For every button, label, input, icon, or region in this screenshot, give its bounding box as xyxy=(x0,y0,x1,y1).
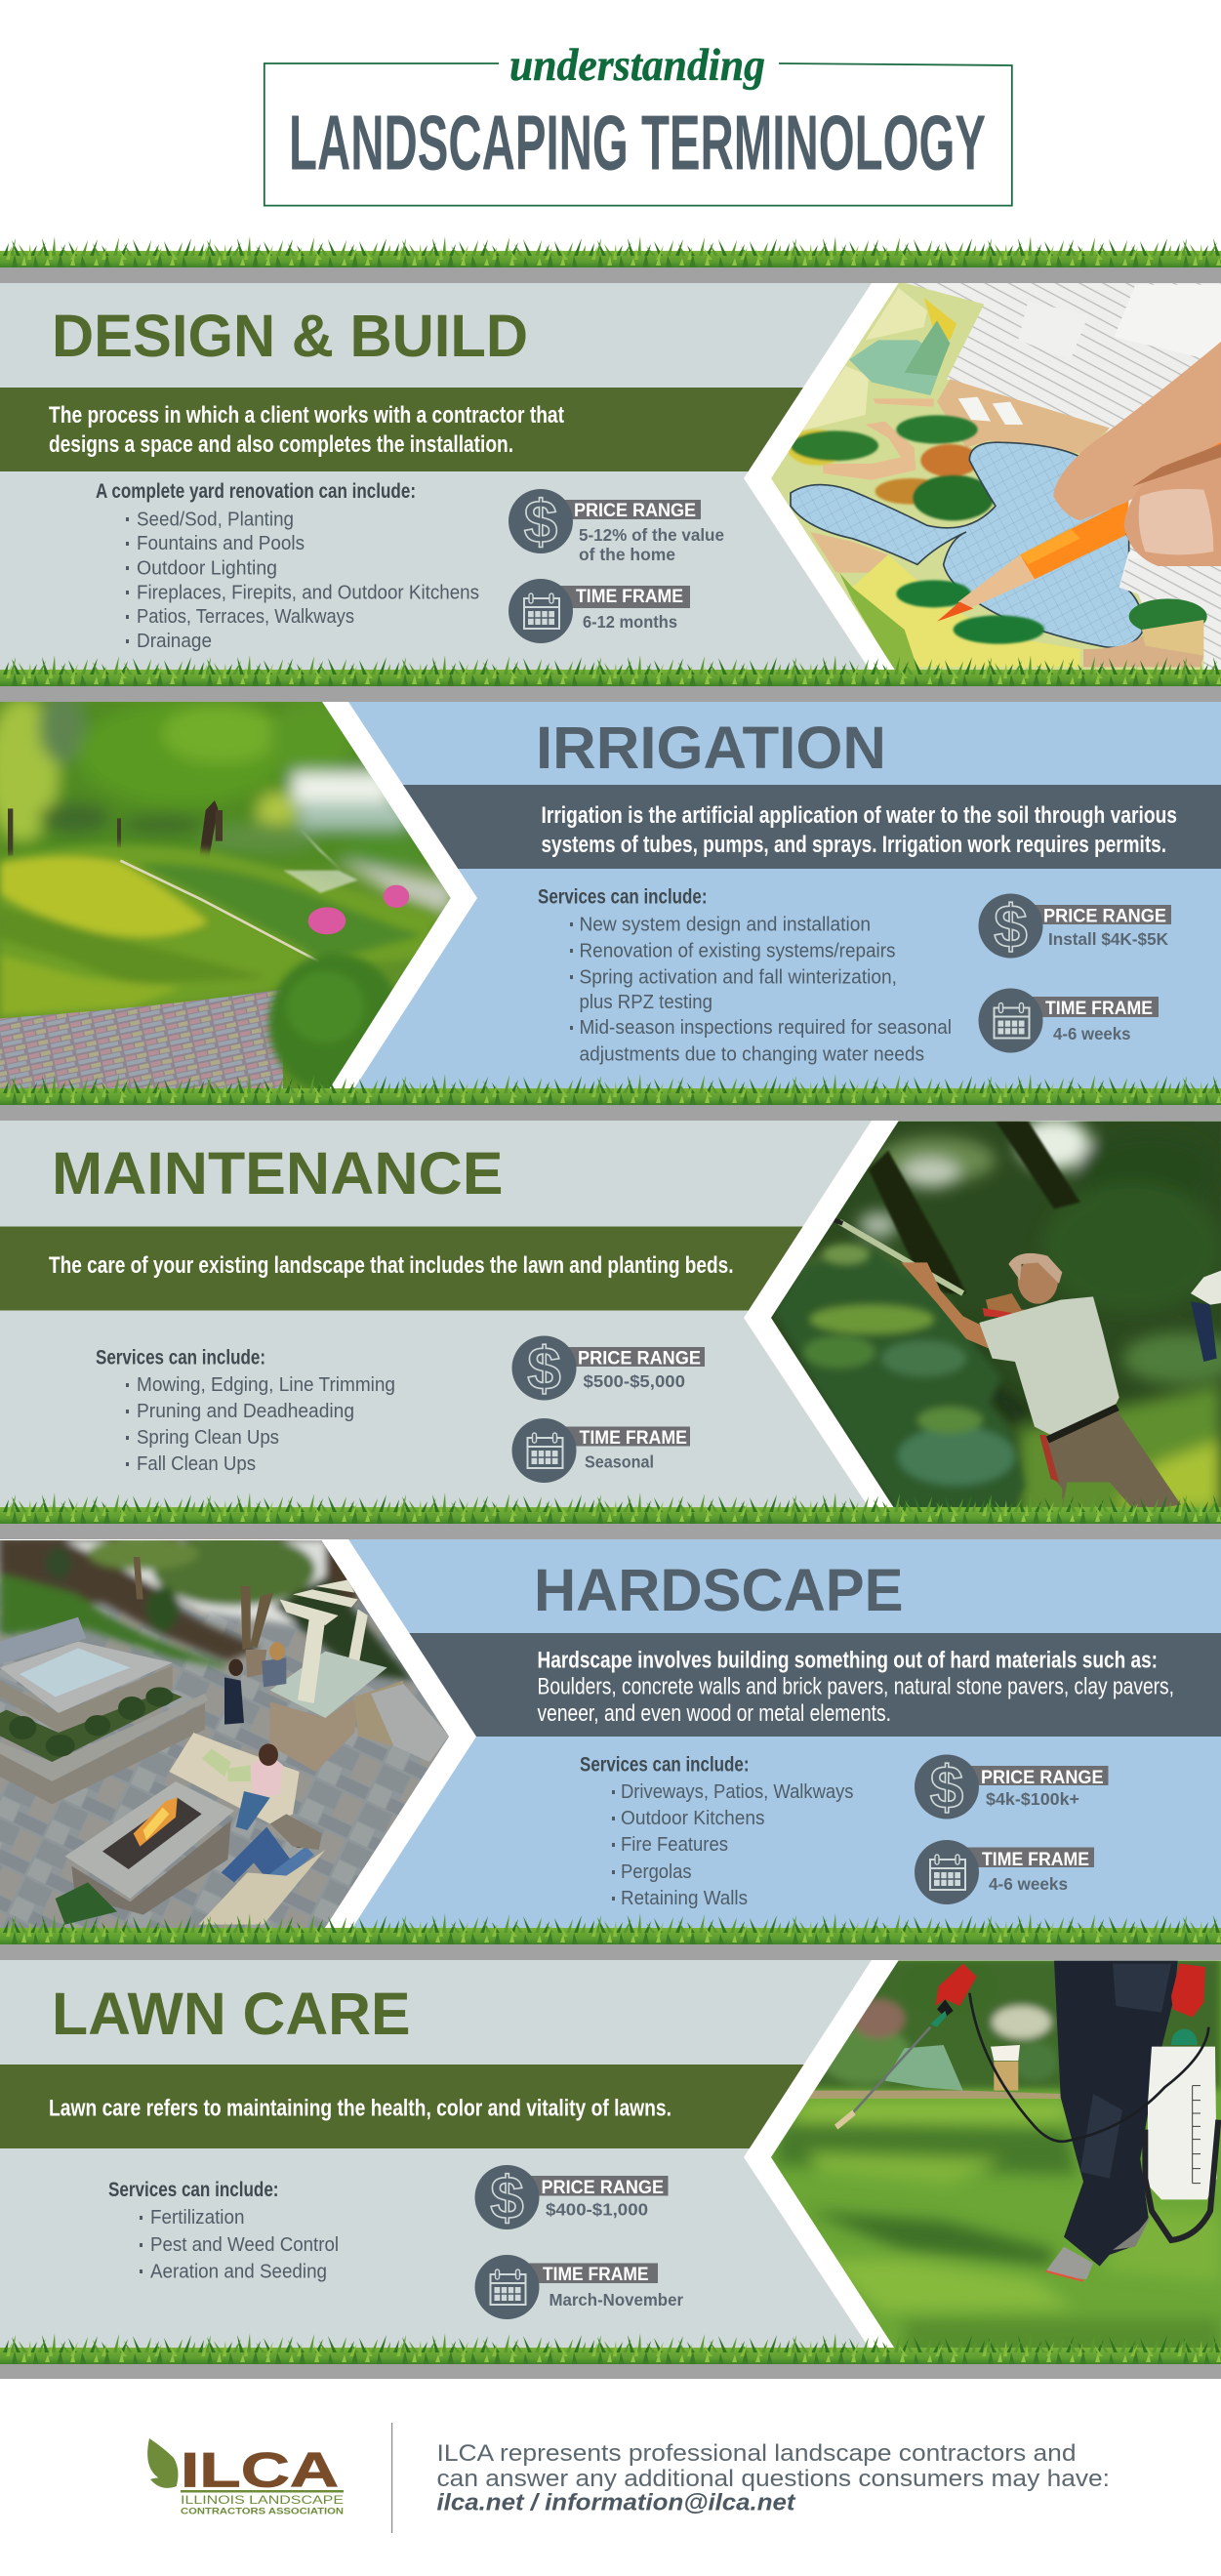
grass divider 2 xyxy=(0,1074,1221,1105)
grey bar 1 xyxy=(0,686,1221,702)
time frame: irrigation: TIME FRAME xyxy=(1045,999,1153,1019)
services list: design and build: Fireplaces, Firepits, and Outdoor Kitchens xyxy=(137,582,479,603)
price range: hardscape: $4k-$100k+ xyxy=(986,1789,1079,1809)
description band: maintenance xyxy=(0,1226,878,1310)
price range: irrigation: PRICE RANGE xyxy=(1043,906,1166,927)
grey bar 2 xyxy=(0,1105,1221,1121)
services list: irrigation xyxy=(538,886,952,1066)
time frame: design and build: TIME FRAME xyxy=(576,587,683,607)
description band: hardscape: veneer, and even wood or metal elements. xyxy=(537,1700,891,1727)
description band: maintenance: The care of your existing landscape that includes the lawn and planting beds. xyxy=(49,1252,734,1279)
title script word: understanding: understanding xyxy=(509,40,765,91)
price range: design and build: 5-12% of the value xyxy=(579,525,724,545)
services list: lawn care: Pest and Weed Control xyxy=(150,2234,339,2256)
services list: hardscape: Pergolas xyxy=(621,1861,691,1883)
footer text: can answer any additional questions consumers may have: xyxy=(437,2466,1110,2492)
icon: leaves xyxy=(147,2438,178,2488)
panel: maintenance xyxy=(0,1118,1221,1528)
services list: lawn care: Services can include: xyxy=(108,2179,279,2201)
description band: irrigation xyxy=(390,785,1221,869)
time frame: lawn care: March-November xyxy=(549,2290,683,2310)
price range: irrigation: Install $4K-$5K xyxy=(1048,929,1168,949)
description band: lawn care xyxy=(0,2065,878,2148)
time frame: maintenance: Seasonal xyxy=(585,1452,654,1472)
logo: ILCA: ILLINOIS LANDSCAPE xyxy=(181,2493,344,2507)
panel: lawn care xyxy=(0,1957,1221,2374)
services list: design and build: Patios, Terraces, Walkways xyxy=(137,606,354,628)
services list: irrigation: Renovation of existing systems/repairs xyxy=(580,941,896,962)
services list: irrigation: adjustments due to changing water needs xyxy=(580,1044,924,1066)
footer text xyxy=(437,2440,1110,2516)
description band: hardscape xyxy=(390,1633,1221,1737)
description band: design and build xyxy=(0,388,878,471)
services list: maintenance xyxy=(96,1347,395,1475)
services list: hardscape xyxy=(580,1753,853,1909)
price range: maintenance: $ xyxy=(527,1335,561,1404)
grey bar 5 xyxy=(0,2364,1221,2379)
time frame: maintenance xyxy=(511,1418,690,1483)
heading: lawn care: LAWN CARE xyxy=(52,1981,410,2047)
price range: lawn care: $ xyxy=(490,2165,524,2232)
price range: maintenance xyxy=(511,1335,705,1404)
grass divider 1 xyxy=(0,655,1221,686)
price range: lawn care: PRICE RANGE xyxy=(541,2178,664,2198)
services list: irrigation: New system design and installation xyxy=(580,914,871,935)
panel: irrigation xyxy=(0,691,1221,1108)
grass divider 3 xyxy=(0,1492,1221,1524)
services list: irrigation: Services can include: xyxy=(538,886,707,908)
time frame: lawn care xyxy=(474,2255,683,2319)
heading: design and build: DESIGN & BUILD xyxy=(52,303,528,369)
photo: sprinklers on lawn xyxy=(0,702,451,1088)
services list: maintenance: Fall Clean Ups xyxy=(137,1453,256,1475)
services list: lawn care xyxy=(108,2179,339,2282)
services list: design and build: Fountains and Pools xyxy=(137,533,305,554)
price range: design and build: of the home xyxy=(579,545,675,564)
heading: irrigation: IRRIGATION xyxy=(536,715,886,781)
services list: maintenance: Services can include: xyxy=(96,1347,265,1369)
services list: hardscape: Outdoor Kitchens xyxy=(621,1808,765,1829)
time frame: irrigation xyxy=(978,988,1159,1052)
price range: hardscape: $ xyxy=(930,1755,963,1821)
time frame: maintenance: TIME FRAME xyxy=(580,1428,687,1449)
photo: patio with fire pit xyxy=(0,1540,449,1928)
footer text: ILCA represents professional landscape contractors and xyxy=(437,2440,1076,2467)
heading: hardscape: HARDSCAPE xyxy=(534,1557,904,1623)
time frame: design and build: 6-12 months xyxy=(583,612,677,632)
description band: design and build: designs a space and also completes the installation. xyxy=(49,431,513,458)
grass divider 5 xyxy=(0,2333,1221,2364)
time frame: lawn care: TIME FRAME xyxy=(543,2265,648,2285)
services list: maintenance: Mowing, Edging, Line Trimming xyxy=(137,1374,395,1396)
logo: ILCA: CONTRACTORS ASSOCIATION xyxy=(181,2507,344,2516)
grey bar 3 xyxy=(0,1524,1221,1539)
price range: maintenance: PRICE RANGE xyxy=(578,1349,701,1369)
price range: design and build: $ xyxy=(524,489,557,556)
price range: hardscape xyxy=(915,1755,1109,1821)
services list: hardscape: Services can include: xyxy=(580,1753,750,1777)
price range: maintenance: $500-$5,000 xyxy=(584,1371,685,1391)
photo: hand drawing landscape plan xyxy=(771,283,1221,670)
services list: design and build: Seed/Sod, Planting xyxy=(137,510,294,531)
time frame: irrigation: 4-6 weeks xyxy=(1053,1024,1131,1043)
description band: design and build: The process in which a client works with a contractor that xyxy=(49,402,564,429)
services list: design and build: Drainage xyxy=(137,631,212,652)
grey bar top xyxy=(0,267,1221,283)
time frame: design and build xyxy=(509,579,690,643)
services list: design and build: A complete yard renovation can include: xyxy=(96,480,416,503)
photo: worker pruning shrubs xyxy=(771,1121,1221,1507)
services list: lawn care: Aeration and Seeding xyxy=(150,2261,327,2282)
description band: lawn care: Lawn care refers to maintaining the health, color and vitality of lawns. xyxy=(49,2095,672,2122)
footer text: ilca.net / information@ilca.net xyxy=(437,2489,796,2516)
services list: irrigation: plus RPZ testing xyxy=(580,992,712,1013)
time frame: hardscape xyxy=(915,1840,1094,1904)
price range: design and build xyxy=(509,489,724,564)
price range: hardscape: PRICE RANGE xyxy=(981,1768,1103,1788)
grey bar 4 xyxy=(0,1944,1221,1960)
panel: design and build xyxy=(0,278,1221,688)
services list: lawn care: Fertilization xyxy=(150,2207,244,2228)
services list: hardscape: Fire Features xyxy=(621,1834,728,1856)
photo: lawn spraying xyxy=(771,1960,1221,2348)
services list: maintenance: Pruning and Deadheading xyxy=(137,1401,354,1422)
services list: hardscape: Driveways, Patios, Walkways xyxy=(621,1781,853,1803)
services list: irrigation: Mid-season inspections required for seasonal xyxy=(580,1017,952,1039)
logo: ILCA xyxy=(147,2438,344,2516)
services list: design and build xyxy=(96,480,479,652)
price range: irrigation xyxy=(978,894,1171,961)
price range: irrigation: $ xyxy=(994,894,1028,961)
services list: irrigation: Spring activation and fall winterization, xyxy=(580,966,897,988)
heading: maintenance: MAINTENANCE xyxy=(52,1140,504,1206)
grass divider 4 xyxy=(0,1913,1221,1944)
grass divider top xyxy=(0,236,1221,267)
price range: lawn care xyxy=(474,2165,668,2232)
price range: lawn care: $400-$1,000 xyxy=(546,2200,648,2220)
header title box xyxy=(265,40,1012,206)
services list: hardscape: Retaining Walls xyxy=(621,1888,748,1909)
panel: hardscape xyxy=(0,1534,1221,1947)
price range: design and build: PRICE RANGE xyxy=(574,501,696,521)
time frame: hardscape: TIME FRAME xyxy=(982,1850,1089,1870)
services list: design and build: Outdoor Lighting xyxy=(137,558,277,580)
logo: ILCA: ILCA xyxy=(181,2442,339,2497)
services list: maintenance: Spring Clean Ups xyxy=(137,1427,279,1449)
time frame: hardscape: 4-6 weeks xyxy=(989,1874,1068,1894)
